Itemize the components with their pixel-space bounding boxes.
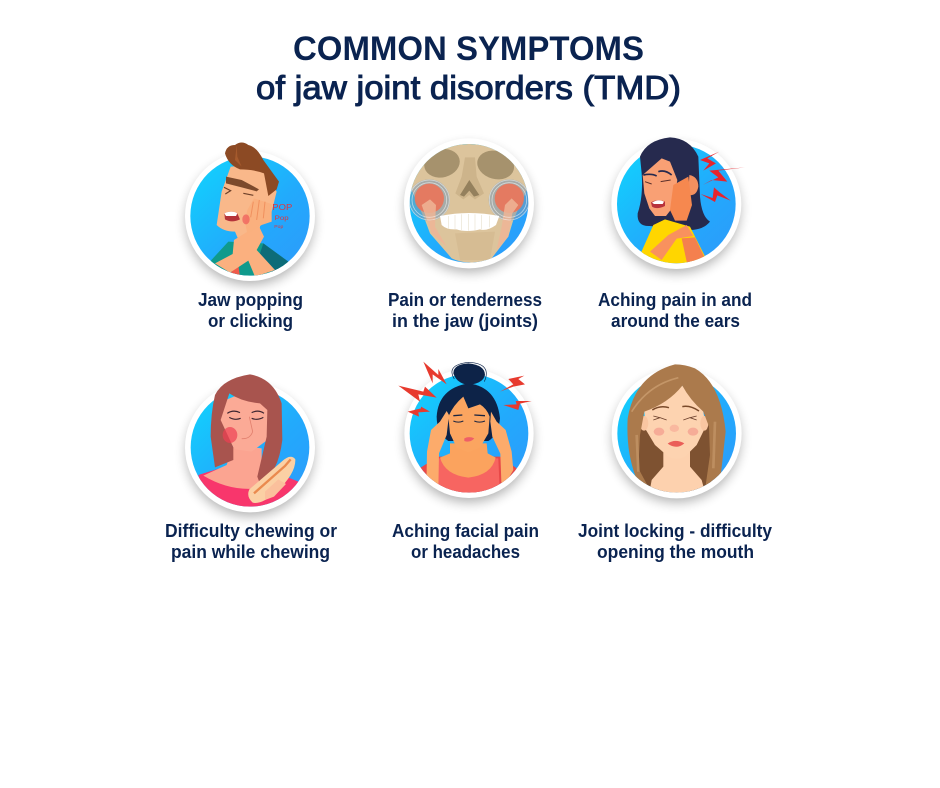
label: opening the mouth — [597, 542, 754, 562]
icon: man holding jaw — [185, 142, 315, 285]
label: pain while chewing — [171, 542, 330, 562]
label — [198, 290, 303, 331]
icon: man holding jaw: Pop — [274, 224, 284, 229]
label: Aching facial pain — [392, 521, 539, 541]
icon: man holding jaw: Pop — [275, 215, 289, 222]
icon: woman with headache — [398, 362, 534, 502]
label — [578, 521, 772, 562]
label: Aching pain in and — [598, 290, 752, 310]
label — [165, 521, 337, 562]
label: or clicking — [208, 311, 293, 331]
icon: woman chewing hot dog — [185, 374, 315, 516]
icon: skull with inflamed joints — [404, 138, 534, 272]
title — [256, 30, 681, 106]
label: Jaw popping — [198, 290, 303, 310]
label: Difficulty chewing or — [165, 521, 337, 541]
label — [388, 290, 542, 331]
label: or headaches — [411, 542, 520, 562]
icon: woman holding ear — [611, 137, 745, 273]
label — [598, 290, 752, 331]
label: around the ears — [611, 311, 740, 331]
panel: difficulty chewing — [165, 374, 337, 562]
label: Pain or tenderness — [388, 290, 542, 310]
label — [392, 521, 539, 562]
panel: facial pain or headaches — [392, 362, 539, 562]
panel: jaw joint pain — [388, 138, 542, 331]
panel: ear pain — [598, 137, 752, 331]
icon: man holding jaw: POP — [272, 202, 293, 212]
title: COMMON SYMPTOMS — [293, 30, 644, 68]
label: Joint locking - difficulty — [578, 521, 772, 541]
label: in the jaw (joints) — [392, 311, 538, 331]
icon: woman with closed mouth — [612, 364, 742, 502]
panel: jaw popping — [185, 142, 315, 331]
panel: joint locking — [578, 364, 772, 562]
title: of jaw joint disorders (TMD) — [256, 69, 681, 106]
